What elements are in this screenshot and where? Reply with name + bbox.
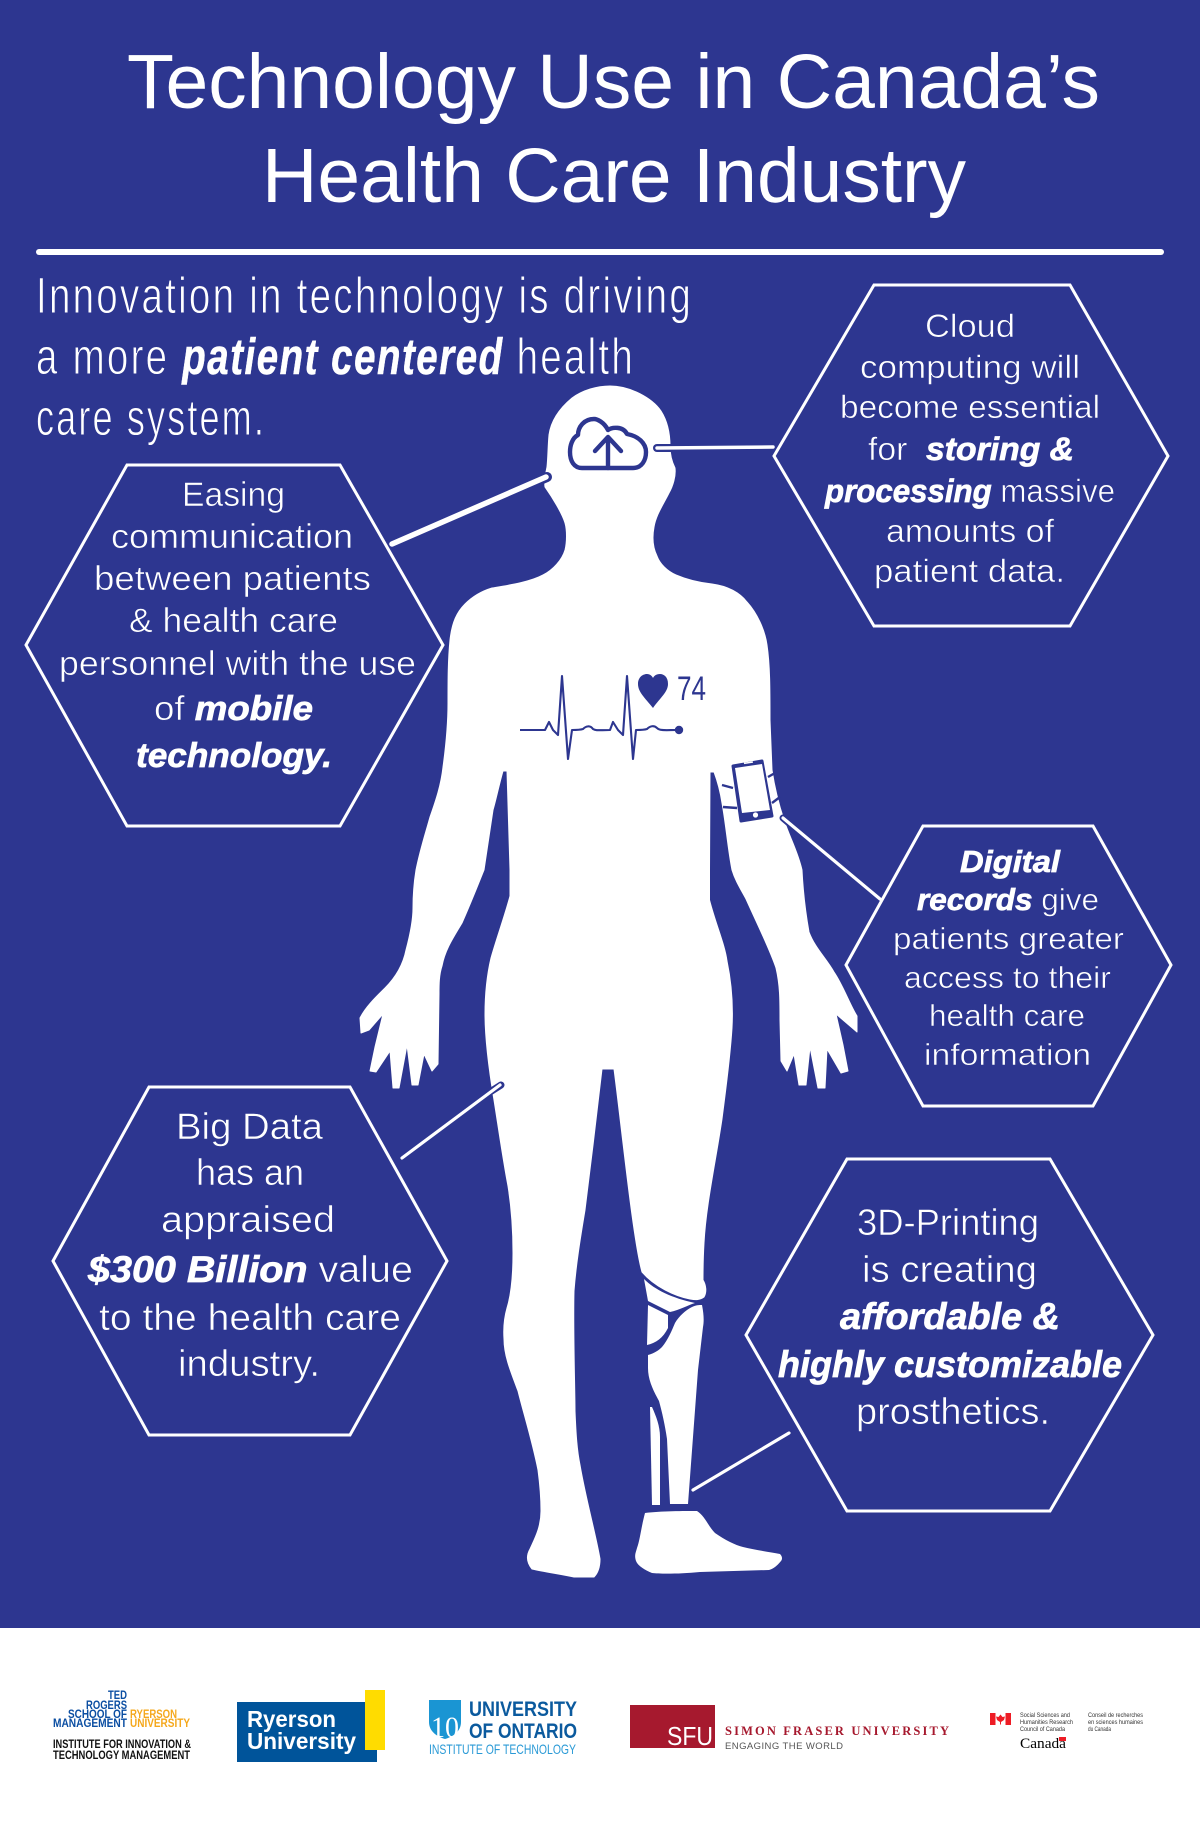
logo: Ted Rogers School of Management: SCHOOL OF bbox=[68, 1709, 127, 1721]
panel: digital records bbox=[846, 826, 1171, 1106]
3D printing text bbox=[778, 1202, 1122, 1432]
intro text: a more patient centered health bbox=[36, 328, 635, 385]
big data text: Big Data bbox=[176, 1106, 323, 1147]
mobile technology text: Easing bbox=[182, 476, 285, 514]
digital records text: access to their bbox=[904, 960, 1111, 995]
big data text bbox=[87, 1106, 413, 1384]
title: Health Care Industry bbox=[262, 133, 966, 219]
3D printing text: affordable & bbox=[840, 1296, 1060, 1337]
logo: SSHRC Canada: Social Sciences and bbox=[1020, 1713, 1070, 1719]
prosthetic leg bbox=[635, 1279, 782, 1574]
cloud computing text: for storing & bbox=[868, 431, 1074, 467]
logo: University of Ontario Institute of Technology: INSTITUTE OF TECHNOLOGY bbox=[429, 1741, 576, 1757]
3D printing text: is creating bbox=[862, 1249, 1037, 1290]
title: Technology Use in Canada’s bbox=[127, 39, 1100, 125]
mobile technology text: of mobile bbox=[154, 690, 313, 728]
connector: 3D printing bbox=[693, 1433, 789, 1490]
mobile technology text: personnel with the use bbox=[59, 645, 416, 683]
icon: smartphone armband bbox=[722, 761, 780, 821]
title rule bbox=[36, 249, 1164, 255]
logo: SSHRC Canada: Council of Canada bbox=[1020, 1727, 1066, 1733]
logo: SSHRC Canada: du Canada bbox=[1088, 1727, 1112, 1733]
footer panel bbox=[0, 1628, 1200, 1840]
logo: Simon Fraser University: SFU bbox=[667, 1721, 713, 1751]
big data text: $300 Billion value bbox=[87, 1249, 413, 1290]
mobile technology text: & health care bbox=[129, 602, 338, 640]
logo: Ted Rogers School of Management: INSTITUTE FOR INNOVATION & bbox=[53, 1739, 191, 1751]
logo: Ted Rogers School of Management: TECHNOLOGY MANAGEMENT bbox=[53, 1750, 190, 1762]
logo: Simon Fraser University bbox=[630, 1705, 949, 1752]
mobile technology text: communication bbox=[111, 518, 353, 556]
panel: cloud computing bbox=[774, 285, 1168, 626]
3D printing text: highly customizable bbox=[778, 1344, 1122, 1385]
big data text: industry. bbox=[178, 1343, 320, 1384]
title bbox=[127, 39, 1100, 219]
logo: SSHRC Canada: Humanities Research bbox=[1020, 1720, 1073, 1726]
logo: University of Ontario Institute of Technology: OF ONTARIO bbox=[469, 1720, 577, 1743]
logo: University of Ontario Institute of Technology bbox=[429, 1698, 577, 1757]
mobile technology text: technology. bbox=[136, 737, 332, 775]
big data text: to the health care bbox=[99, 1297, 401, 1338]
connector: cloud bbox=[657, 447, 773, 448]
panel: mobile technology bbox=[26, 465, 443, 826]
big data text: has an bbox=[196, 1152, 304, 1193]
digital records text: patients greater bbox=[893, 921, 1124, 956]
logo: University of Ontario Institute of Technology: UNIVERSITY bbox=[469, 1698, 577, 1721]
big data text: appraised bbox=[161, 1199, 335, 1240]
cloud computing text bbox=[824, 308, 1115, 589]
logo: Ryerson University: Ryerson bbox=[247, 1706, 336, 1732]
logo: Ted Rogers School of Management: UNIVERSITY bbox=[130, 1718, 190, 1730]
human body figure bbox=[360, 386, 857, 1577]
digital records text: records give bbox=[917, 882, 1099, 917]
intro text: care system. bbox=[36, 389, 266, 446]
intro text bbox=[36, 267, 693, 446]
3D printing text: prosthetics. bbox=[856, 1391, 1050, 1432]
logo: Ryerson University: University bbox=[247, 1728, 356, 1754]
panel: big data bbox=[53, 1087, 447, 1435]
mobile technology text bbox=[59, 476, 416, 775]
digital records text: health care bbox=[929, 998, 1085, 1033]
logo: Ted Rogers School of Management: MANAGEMENT bbox=[53, 1718, 127, 1730]
connector: digital records bbox=[783, 818, 880, 899]
logo: Simon Fraser University: ENGAGING THE WORLD bbox=[725, 1741, 843, 1752]
connector: big data bbox=[402, 1085, 501, 1158]
logo: SSHRC Canada: Conseil de recherches bbox=[1088, 1713, 1143, 1719]
logo: Ryerson University bbox=[237, 1690, 385, 1762]
digital records text: information bbox=[924, 1037, 1091, 1072]
icon: ecg heartbeat line bbox=[520, 676, 683, 759]
heart rate number: 74 bbox=[677, 670, 706, 708]
intro text: Innovation in technology is driving bbox=[36, 267, 693, 324]
mobile technology text: between patients bbox=[94, 560, 371, 598]
cloud computing text: patient data. bbox=[874, 553, 1065, 589]
logo: Ted Rogers School of Management: RYERSON bbox=[130, 1709, 177, 1721]
logo: Ted Rogers School of Management bbox=[53, 1690, 191, 1762]
logo: SSHRC Canada: en sciences humaines bbox=[1088, 1720, 1143, 1726]
cloud computing text: become essential bbox=[840, 389, 1100, 425]
digital records text bbox=[893, 844, 1124, 1072]
3D printing text: 3D-Printing bbox=[857, 1202, 1039, 1243]
panel: 3D printing bbox=[746, 1159, 1153, 1511]
digital records text: Digital bbox=[960, 844, 1061, 879]
logo: Simon Fraser University: SIMON FRASER UNIVERSITY bbox=[725, 1724, 949, 1738]
logo: SSHRC Canada: Canada bbox=[1020, 1736, 1066, 1752]
icon: cloud upload bbox=[570, 419, 646, 468]
logo: University of Ontario Institute of Technology: 10 bbox=[431, 1711, 459, 1744]
cloud computing text: Cloud bbox=[925, 308, 1015, 344]
cloud computing text: computing will bbox=[860, 349, 1080, 385]
cloud computing text: processing massive bbox=[824, 473, 1115, 509]
icon: heart bbox=[638, 674, 668, 708]
body silhouette bbox=[360, 386, 857, 1577]
connector: mobile technology bbox=[392, 477, 547, 544]
logo: Ted Rogers School of Management: TED bbox=[108, 1690, 127, 1702]
cloud computing text: amounts of bbox=[886, 513, 1054, 549]
logo: SSHRC Canada bbox=[990, 1713, 1143, 1752]
logo: Ted Rogers School of Management: ROGERS bbox=[86, 1700, 127, 1712]
